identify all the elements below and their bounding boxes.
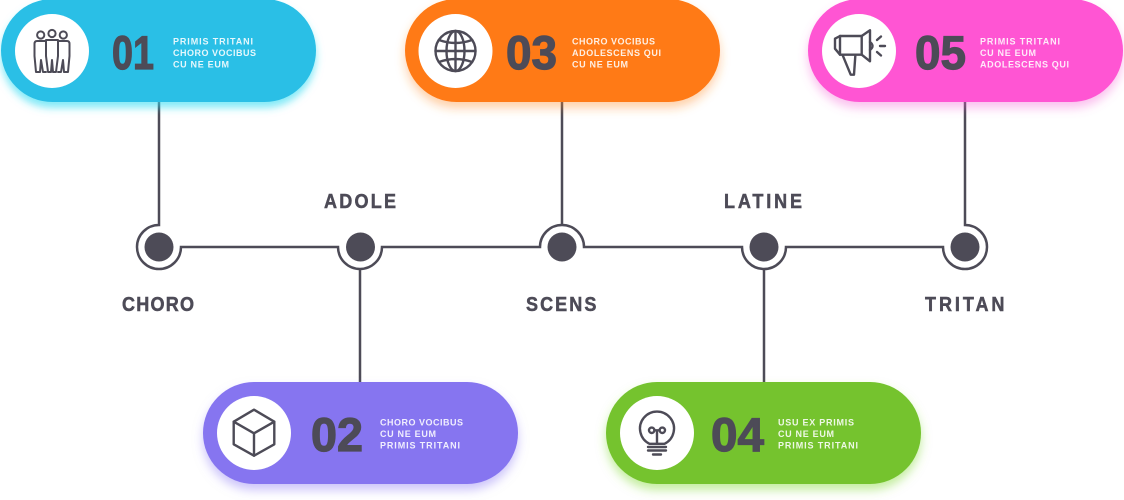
description: PRIMIS TRITANI [380, 440, 460, 450]
icon: cube [234, 410, 274, 456]
description: CU NE EUM [980, 48, 1036, 58]
description: PRIMIS TRITANI [778, 440, 858, 450]
label: adole: ADOLE [324, 191, 396, 213]
number: 04 [711, 408, 764, 461]
number: 05 [915, 26, 966, 79]
panel: step 03 [405, 0, 720, 102]
label: latine: LATINE [724, 191, 802, 213]
panel: step 02 [203, 382, 518, 484]
icon circle [217, 396, 291, 470]
description: PRIMIS TRITANI [980, 37, 1060, 47]
description: CU NE EUM [572, 60, 628, 70]
description [380, 418, 463, 450]
panel: step 05 [808, 0, 1123, 102]
icon: people [34, 30, 70, 72]
label: scens: SCENS [526, 294, 597, 316]
panel: step 04 [606, 382, 921, 484]
pill background [405, 0, 720, 102]
panel: step 01 [1, 0, 316, 102]
description [778, 418, 858, 450]
pill background [606, 382, 921, 484]
description: CHORO VOCIBUS [173, 48, 256, 58]
node: adole [346, 232, 375, 262]
timeline connector [137, 102, 987, 382]
description: CHORO VOCIBUS [380, 418, 463, 428]
icon circle [15, 14, 89, 88]
description: CHORO VOCIBUS [572, 37, 655, 47]
description: PRIMIS TRITANI [173, 37, 253, 47]
description: CU NE EUM [173, 60, 229, 70]
node: choro [144, 232, 174, 262]
icon: megaphone [835, 30, 885, 75]
description [980, 37, 1069, 70]
description: CU NE EUM [380, 429, 436, 439]
label: choro: CHORO [122, 294, 194, 316]
icon circle [418, 14, 492, 88]
description [173, 37, 256, 70]
pill background [808, 0, 1123, 102]
node: tritan [950, 232, 980, 262]
icon circle [620, 396, 694, 470]
node: scens [548, 232, 576, 262]
pill background [203, 382, 518, 484]
pill background [1, 0, 316, 102]
description: USU EX PRIMIS [778, 418, 854, 428]
node: latine [750, 232, 778, 262]
icon circle [822, 14, 896, 88]
label: tritan: TRITAN [925, 294, 1004, 316]
icon: light bulb [640, 412, 674, 454]
description: ADOLESCENS QUI [572, 48, 661, 58]
number: 01 [112, 26, 154, 79]
description: CU NE EUM [778, 429, 834, 439]
icon: globe [436, 31, 476, 71]
number: 02 [311, 408, 363, 461]
description: ADOLESCENS QUI [980, 60, 1069, 70]
description [572, 37, 661, 70]
number: 03 [506, 26, 557, 79]
